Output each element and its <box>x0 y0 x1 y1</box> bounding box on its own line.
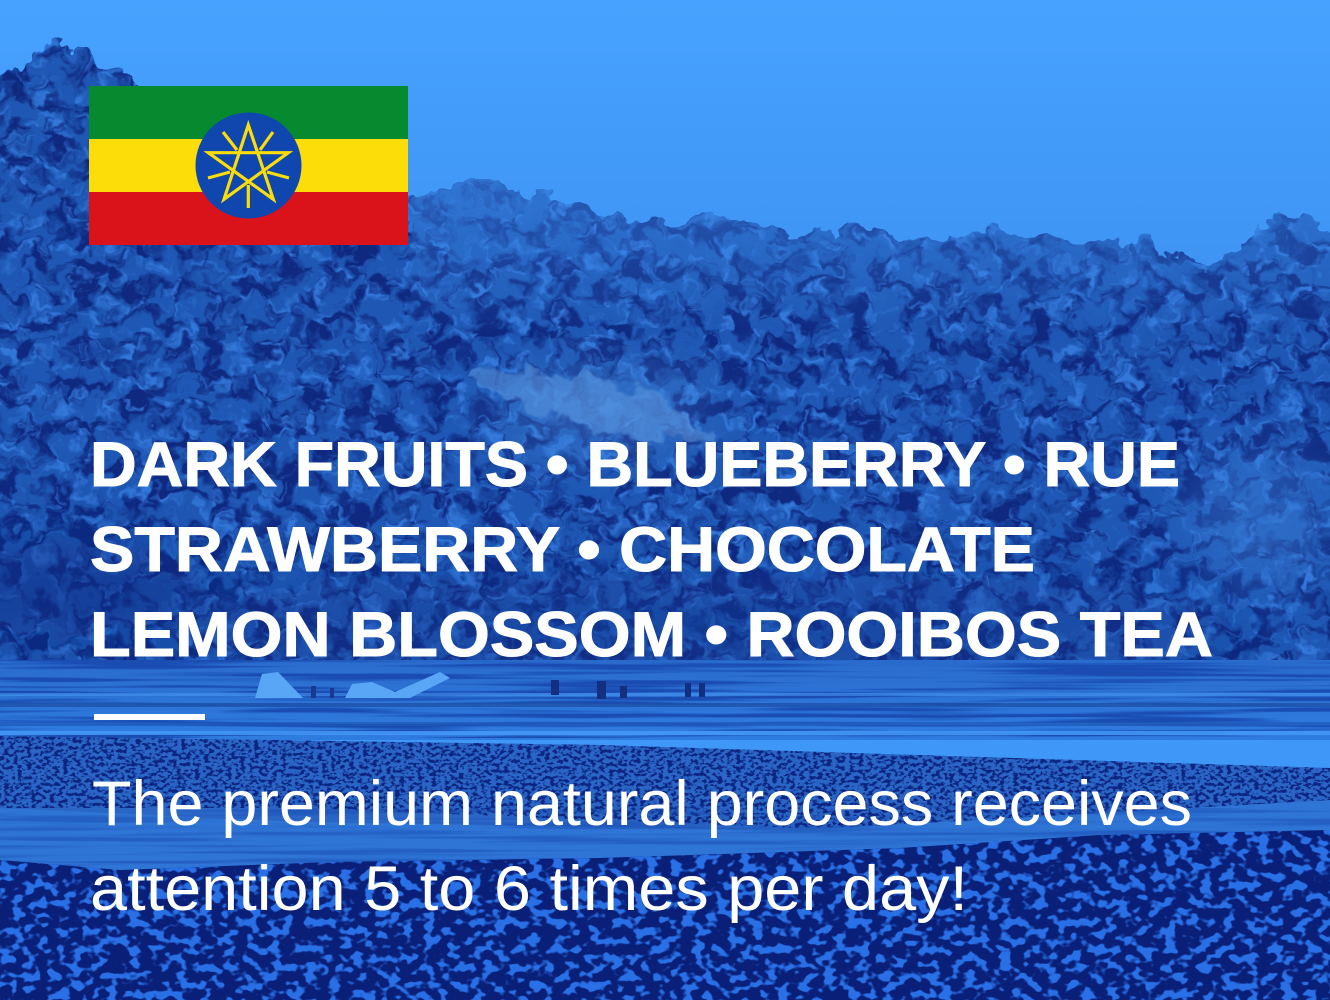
background: far coffee beans <box>0 736 1330 870</box>
icon: workers on the drying beds <box>255 672 705 699</box>
background: near coffee beans <box>0 825 1330 1000</box>
text block: process description: The premium natural process receives <box>92 769 1192 839</box>
background: drying beds and workers <box>0 660 1330 740</box>
divider rule <box>94 714 205 720</box>
heading: tasting notes <box>90 430 1213 670</box>
text block: process description <box>90 769 1192 924</box>
text block: process description: attention 5 to 6 times per day! <box>90 854 968 924</box>
background: sky <box>0 0 1330 330</box>
icon: blue disc with star emblem <box>196 112 302 218</box>
background: forested hillside <box>0 30 1330 690</box>
heading: tasting notes: LEMON BLOSSOM • ROOIBOS TEA <box>90 600 1213 670</box>
heading: tasting notes: DARK FRUITS • BLUEBERRY • RUE <box>90 430 1180 500</box>
heading: tasting notes: STRAWBERRY • CHOCOLATE <box>90 515 1035 585</box>
flag of Ethiopia <box>89 86 408 245</box>
